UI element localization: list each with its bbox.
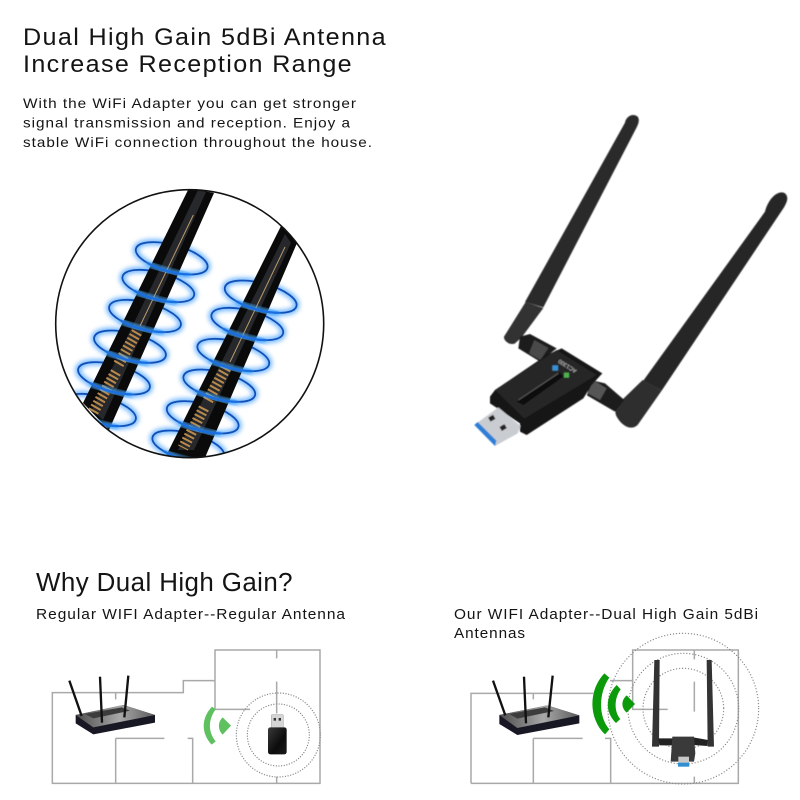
signal rings in front of the antennas: [75, 263, 279, 465]
intro text block: signal transmission and reception. Enjoy a: [23, 114, 351, 130]
weak signal icon: [204, 707, 231, 745]
title: Dual High Gain 5dBi Antenna: [23, 24, 387, 51]
intro text block: stable WiFi connection throughout the house.: [23, 134, 373, 150]
heading: why dual high gain: Why Dual High Gain?: [36, 569, 293, 597]
signal range circles: [236, 693, 320, 777]
strong signal icon: [592, 673, 635, 734]
adapter body and connectors: [490, 334, 624, 435]
adapter body and connectors: AC1300: [558, 357, 578, 373]
panel: antenna close-up circle: [56, 188, 324, 469]
router: [493, 676, 579, 735]
floor plan walls: [471, 650, 738, 783]
intro text block: With the WiFi Adapter you can get stronger: [23, 95, 357, 111]
diagram: dual high gain floor plan: [471, 633, 759, 784]
housing: [490, 348, 602, 435]
label: our adapter: [454, 607, 759, 642]
title: Increase Reception Range: [23, 51, 353, 78]
floor plan walls: [52, 650, 320, 783]
left antenna cross-section: [83, 188, 214, 430]
title: [23, 24, 387, 78]
dual antenna adapter: [652, 660, 714, 767]
product: USB WiFi adapter with two antennas: [474, 115, 787, 446]
right antenna: [615, 192, 787, 428]
diagram: regular adapter floor plan: [52, 650, 320, 783]
signal range circles: [608, 633, 759, 784]
right antenna cross-section: [165, 226, 297, 460]
left antenna: [504, 115, 639, 344]
label: regular adapter: Regular WIFI Adapter--Regular Antenna: [36, 607, 346, 623]
small USB adapter: [268, 715, 287, 754]
label: our adapter: Antennas: [454, 626, 526, 642]
right antenna collar: [587, 380, 624, 412]
signal rings behind the antennas: [61, 236, 300, 469]
left antenna collar: [518, 334, 557, 362]
label: our adapter: Our WIFI Adapter--Dual High Gain 5dBi: [454, 607, 759, 623]
intro text block: [23, 95, 373, 150]
USB connector: [474, 407, 521, 446]
router: [69, 676, 155, 734]
